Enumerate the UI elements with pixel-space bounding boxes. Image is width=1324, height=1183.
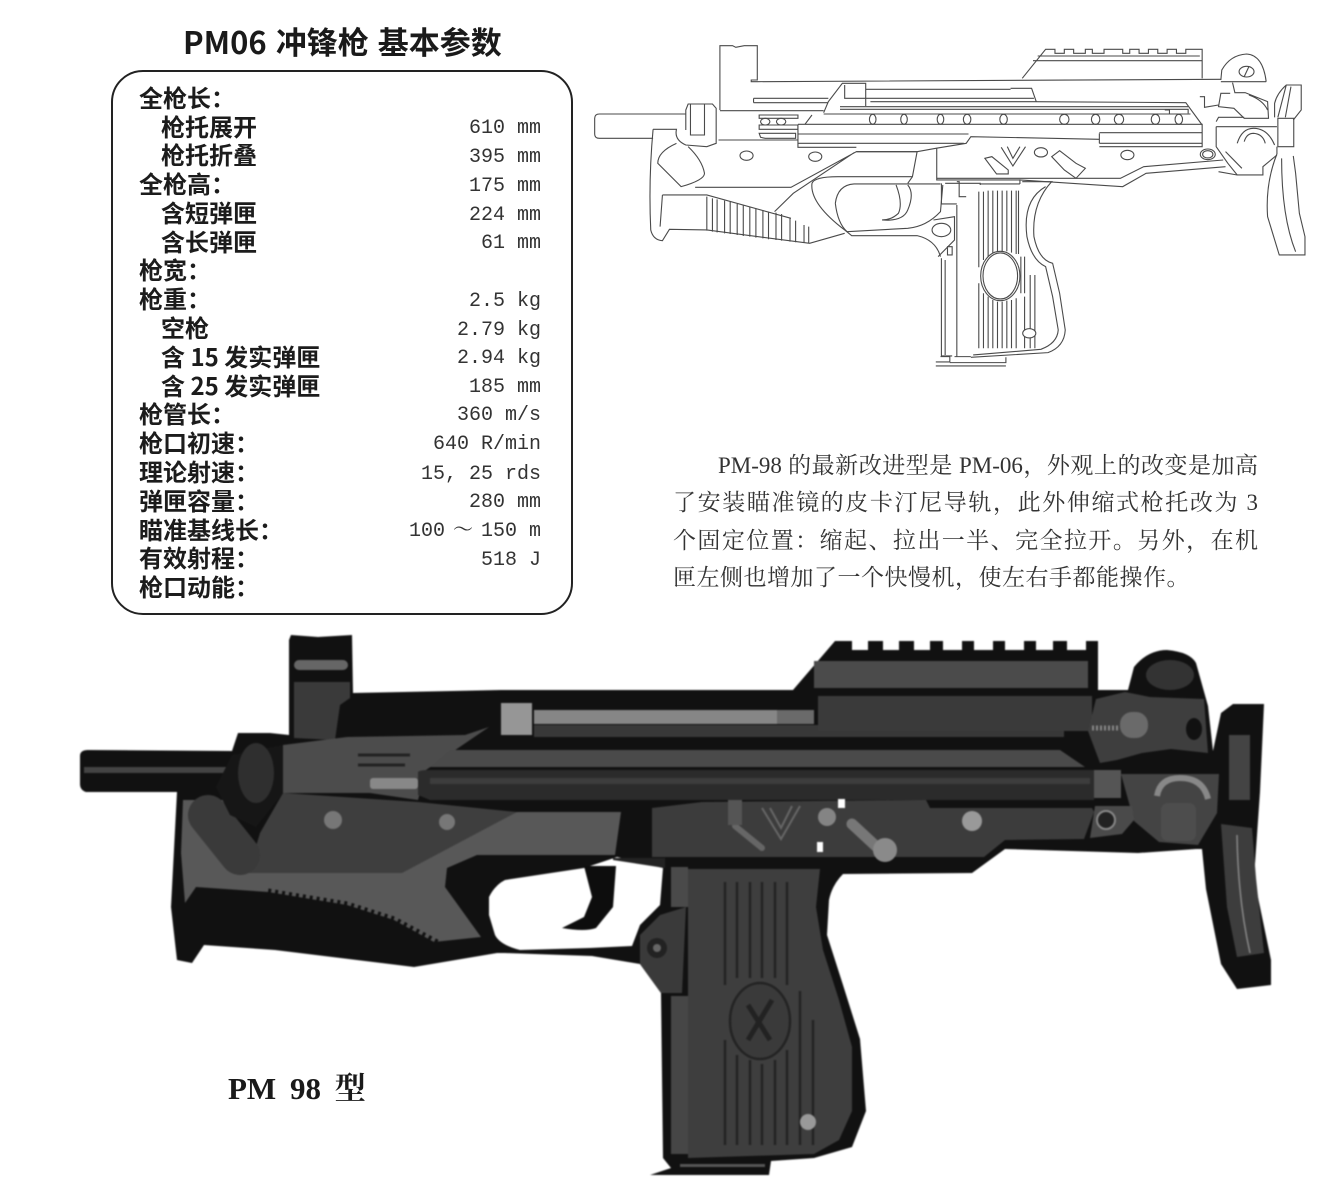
- panel: specifications table: 224 mm: [469, 204, 541, 227]
- panel: specifications table: 有效射程：: [139, 539, 259, 574]
- panel: specifications table: 395 mm: [469, 146, 541, 169]
- panel: specifications table: 360 m/s: [457, 404, 541, 427]
- panel: specifications table: 枪口初速：: [139, 424, 259, 459]
- panel: specifications table: 2.94 kg: [457, 347, 541, 370]
- panel: specifications table: 518 J: [481, 549, 541, 572]
- panel: specifications table: 理论射速：: [139, 453, 259, 488]
- muzzle surround: [216, 745, 283, 827]
- text block: description: [673, 453, 1258, 590]
- trigger guard opening: [489, 857, 663, 950]
- sling loop and pin: [358, 755, 410, 765]
- panel: specifications table: 瞄准基线长：: [139, 511, 283, 546]
- rear grip serrations: [845, 985, 868, 1111]
- title: PM06 冲锋枪 基本参数: [183, 18, 502, 63]
- upper receiver front: [283, 727, 489, 800]
- panel: specifications table: 含短弹匣: [161, 194, 257, 229]
- panel: specifications table: 枪重：: [139, 280, 211, 315]
- panel: specifications table: 640 R/min: [433, 433, 541, 456]
- barrel tube: [418, 770, 1094, 800]
- text block: description: 匣左侧也增加了一个快慢机，使左右手都能操作。: [673, 565, 1190, 590]
- rivets: [324, 811, 342, 829]
- marks: selector and V logo: [762, 806, 800, 839]
- centre receiver: [652, 800, 1094, 857]
- panel: specifications table: 280 mm: [469, 491, 541, 514]
- panel: specifications table: 61 mm: [481, 232, 541, 255]
- panel: specifications table: 全枪高：: [139, 165, 235, 200]
- magazine catch plate: [640, 907, 686, 993]
- panel: specifications table: 空枪: [161, 309, 209, 344]
- panel: specifications table: 185 mm: [469, 376, 541, 399]
- panel: specifications table: 610 mm: [469, 117, 541, 140]
- photo: PM 98 submachine gun: [80, 635, 1271, 1175]
- panel: specifications table: 含 25 发实弹匣: [161, 367, 320, 402]
- handguard: [181, 800, 621, 942]
- panel: specifications table: 弹匣容量：: [139, 482, 259, 517]
- panel: specifications table: 175 mm: [469, 175, 541, 198]
- trigger guard front post: [613, 858, 665, 868]
- barrel highlight: [84, 767, 232, 773]
- panel: specifications table: 含 15 发实弹匣: [161, 338, 320, 373]
- line drawing: PM06 side view: [595, 46, 1305, 366]
- rear block: [1121, 763, 1220, 775]
- rear plate: [1088, 692, 1208, 763]
- panel: specifications table: 100 ～ 150 m: [409, 520, 541, 543]
- panel: specifications table: 2.79 kg: [457, 319, 541, 342]
- gas channel: [480, 744, 1080, 747]
- grip serrations: [268, 892, 437, 943]
- pistol grip: [688, 869, 852, 1158]
- rear panel: [818, 696, 1092, 731]
- stock: [1229, 735, 1250, 800]
- grip ridges: [725, 882, 813, 1145]
- lower receiver: [248, 793, 517, 877]
- panel: specifications table: 15, 25 rds: [421, 463, 541, 486]
- panel: specifications table: 枪托折叠: [161, 136, 257, 171]
- front lever: [208, 815, 240, 855]
- panel: specifications table: 枪宽：: [139, 251, 211, 286]
- panel: specifications table: 2.5 kg: [469, 290, 541, 313]
- text block: description: PM-98 的最新改进型是 PM-06，外观上的改变是加高: [718, 453, 1258, 478]
- panel: specifications table: 枪管长：: [139, 395, 235, 430]
- rail: [814, 661, 1088, 688]
- panel: specifications table: 全枪长：: [139, 79, 235, 114]
- caption: PM 98: PM 98 型: [228, 1071, 366, 1106]
- panel: specifications table: 含长弹匣: [161, 223, 257, 258]
- trigger: [562, 866, 616, 930]
- front sight details: [294, 660, 348, 670]
- rail notches: [852, 640, 1086, 650]
- text block: description: 了安装瞄准镜的皮卡汀尼导轨，此外伸缩式枪托改为 3: [673, 490, 1258, 515]
- panel: specifications table: 枪托展开: [161, 108, 257, 143]
- panel: specifications table: [111, 70, 573, 615]
- slide: [534, 710, 777, 724]
- panel: specifications table: 枪口动能：: [139, 568, 259, 603]
- text block: description: 个固定位置：缩起、拉出一半、完全拉开。另外，在机: [673, 528, 1258, 553]
- silhouette: [80, 635, 1271, 1175]
